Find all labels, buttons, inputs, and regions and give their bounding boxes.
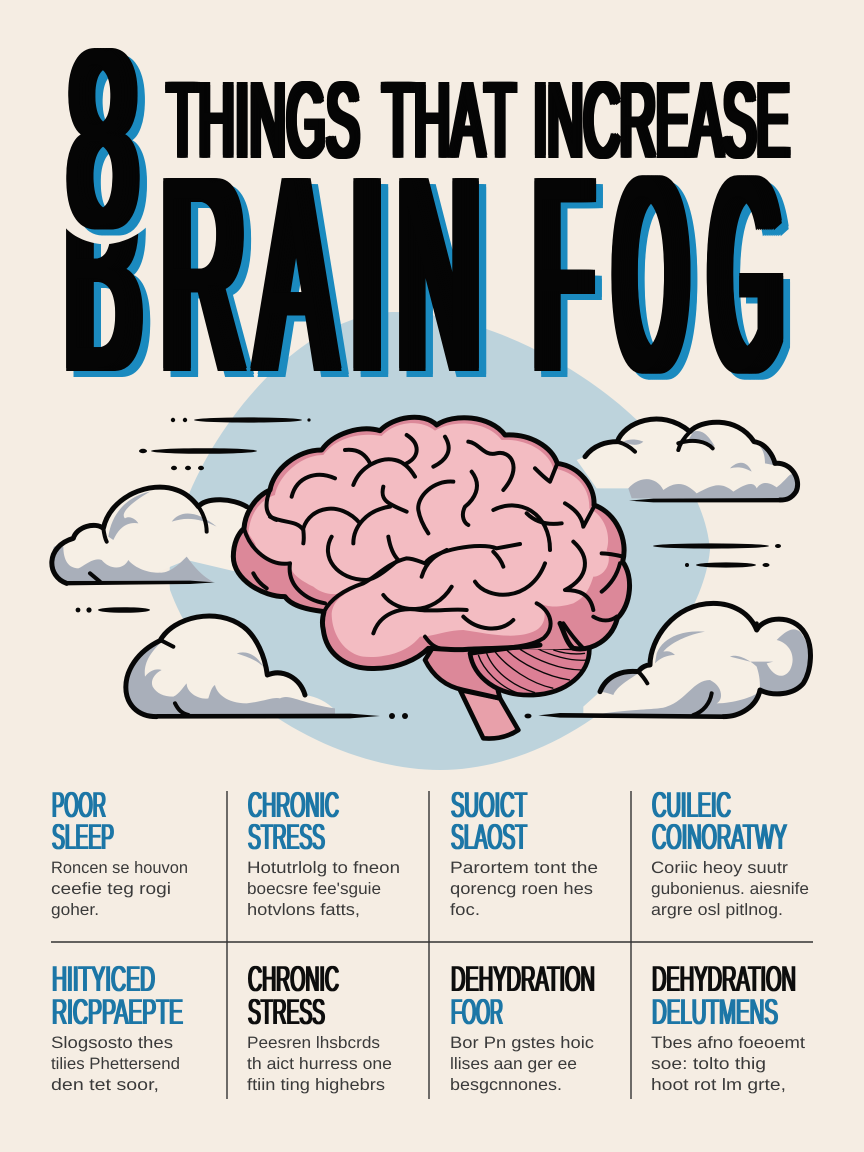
description: ftiin ting highebrs	[247, 1076, 385, 1094]
heading: HIITYICED	[52, 958, 155, 999]
description: argre osl pitlnog.	[651, 901, 783, 919]
cell 5	[51, 958, 183, 1094]
cerebrum highlight	[248, 423, 609, 657]
description: th aict hurress one	[247, 1055, 392, 1073]
cerebellum	[470, 647, 589, 695]
cell 8	[651, 958, 805, 1094]
description: llises aan ger ee	[450, 1055, 577, 1073]
cloud: upper right	[577, 419, 798, 502]
description: foc.	[450, 901, 480, 919]
description	[247, 859, 400, 919]
cell 4	[651, 784, 809, 919]
description: Slogsosto thes	[51, 1034, 173, 1052]
description: besgcnnones.	[450, 1076, 562, 1094]
heading	[248, 958, 339, 1032]
description: Roncen se houvon	[51, 859, 188, 877]
description: tilies Phettersend	[51, 1055, 180, 1073]
description	[450, 1034, 594, 1094]
title: BRAIN: BRAIN	[57, 119, 471, 427]
description	[247, 1034, 392, 1094]
description	[450, 859, 598, 919]
heading: SLEEP	[52, 816, 114, 857]
brain stem	[460, 690, 518, 739]
cerebrum outline	[233, 417, 630, 668]
heading: FOOR	[451, 991, 503, 1032]
heading	[451, 784, 527, 857]
description: Tbes afno foeoemt	[651, 1034, 805, 1052]
description: Peesren lhsbcrds	[247, 1034, 380, 1052]
cell 3	[450, 784, 598, 919]
heading	[652, 784, 787, 857]
description: ceefie teg rogi	[51, 880, 171, 898]
title: FOG: FOG	[527, 119, 772, 427]
description: qorencg roen hes	[450, 880, 593, 898]
heading	[248, 784, 339, 857]
cloud: lower left	[125, 616, 380, 719]
description	[51, 859, 188, 919]
cell 7	[450, 958, 595, 1094]
speed lines	[76, 417, 781, 719]
description: gubonienus. aiesnife	[651, 880, 809, 898]
heading: SLAOST	[451, 816, 527, 857]
brain	[233, 417, 630, 739]
description: soe: tolto thig	[651, 1055, 766, 1073]
description	[651, 859, 809, 919]
heading: CUILEIC	[652, 784, 731, 825]
description: Coriic heoy suutr	[651, 859, 789, 877]
description	[651, 1034, 805, 1094]
sulci	[244, 435, 623, 648]
description	[51, 1034, 180, 1094]
heading	[52, 784, 114, 857]
heading: DEHYDRATION	[451, 958, 595, 999]
cell 2	[247, 784, 400, 919]
heading: SUOICT	[451, 784, 527, 825]
description: Hotutrlolg to fneon	[247, 859, 400, 877]
heading: POOR	[52, 784, 106, 825]
title: numeral 8: 8	[61, 0, 129, 278]
title: things that increase: THINGS THAT INCREASE	[164, 60, 787, 178]
description: Bor Pn gstes hoic	[450, 1034, 594, 1052]
description: Parortem tont the	[450, 859, 598, 877]
description: hoot rot lm grte,	[651, 1076, 786, 1094]
heading: RICPPAEPTE	[52, 991, 183, 1032]
description: hotvlons fatts,	[247, 901, 360, 919]
cloud: lower right	[538, 603, 810, 719]
heading: CHRONIC	[248, 958, 339, 999]
heading	[52, 958, 183, 1032]
heading: STRESS	[248, 816, 325, 857]
description: goher.	[51, 901, 99, 919]
pale blue circle	[169, 312, 710, 770]
cell 1	[51, 784, 188, 919]
description: boecsre fee'sguie	[247, 880, 381, 898]
description: den tet soor,	[51, 1076, 159, 1094]
cell 6	[247, 958, 392, 1094]
heading	[451, 958, 595, 1032]
heading: STRESS	[248, 991, 325, 1032]
heading	[652, 958, 796, 1032]
cloud: upper left	[51, 487, 251, 585]
cerebrum base	[233, 417, 630, 668]
heading: CHRONIC	[248, 784, 339, 825]
pons	[425, 647, 500, 698]
